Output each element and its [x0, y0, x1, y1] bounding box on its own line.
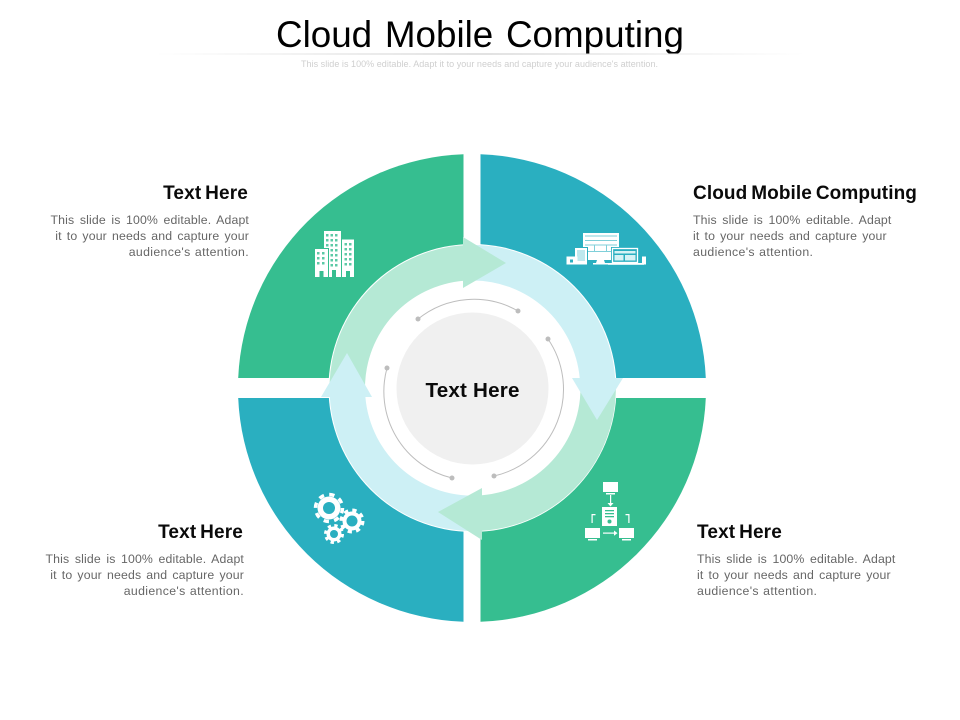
subtitle: This slide is 100% editable. Adapt it to your needs and capture your audience's attention.	[301, 59, 658, 69]
panel: top-right teal quadrant	[480, 154, 706, 378]
text block: top-right: audience's attention.	[693, 245, 813, 259]
panel: top-left green quadrant	[238, 154, 464, 378]
text block: bottom-right: This slide is 100% editable. Adapt	[697, 552, 896, 566]
text block: bottom-right: it to your needs and capture your	[697, 568, 891, 582]
text block: top-left: This slide is 100% editable. Adapt	[51, 213, 249, 227]
text block: bottom-right	[697, 522, 896, 598]
panel: bottom-right green quadrant	[480, 398, 706, 622]
icon: gears	[316, 494, 363, 542]
text block: top-right: it to your needs and capture your	[693, 229, 887, 243]
text block: top-left: it to your needs and capture your	[55, 229, 249, 243]
text block: bottom-right: Text Here	[697, 522, 782, 543]
icon: network	[585, 482, 634, 540]
text block: bottom-left: Text Here	[158, 522, 243, 543]
inner thin arcs	[384, 299, 563, 480]
text block: top-right: This slide is 100% editable. Adapt	[693, 213, 892, 227]
text block: bottom-left	[46, 522, 244, 598]
text block: top-left	[51, 183, 249, 259]
panel: bottom-left teal quadrant	[238, 398, 464, 622]
text block: top-right: Cloud Mobile Computing	[693, 183, 917, 204]
text block: bottom-left: audience's attention.	[124, 584, 244, 598]
icon: devices	[566, 233, 646, 266]
text block: bottom-left: This slide is 100% editable. Adapt	[46, 552, 244, 566]
text block: top-left: Text Here	[163, 183, 248, 204]
cycle ring arrows	[321, 237, 623, 540]
center circle	[396, 312, 548, 464]
text block: top-left: audience's attention.	[129, 245, 249, 259]
text block: top-right	[693, 183, 917, 259]
text block: bottom-right: audience's attention.	[697, 584, 817, 598]
icon: buildings	[314, 231, 355, 277]
text block: bottom-left: it to your needs and capture your	[50, 568, 244, 582]
white ring backing	[328, 244, 616, 532]
center label: Text Here	[426, 379, 520, 402]
title: Cloud Mobile Computing	[276, 14, 684, 55]
